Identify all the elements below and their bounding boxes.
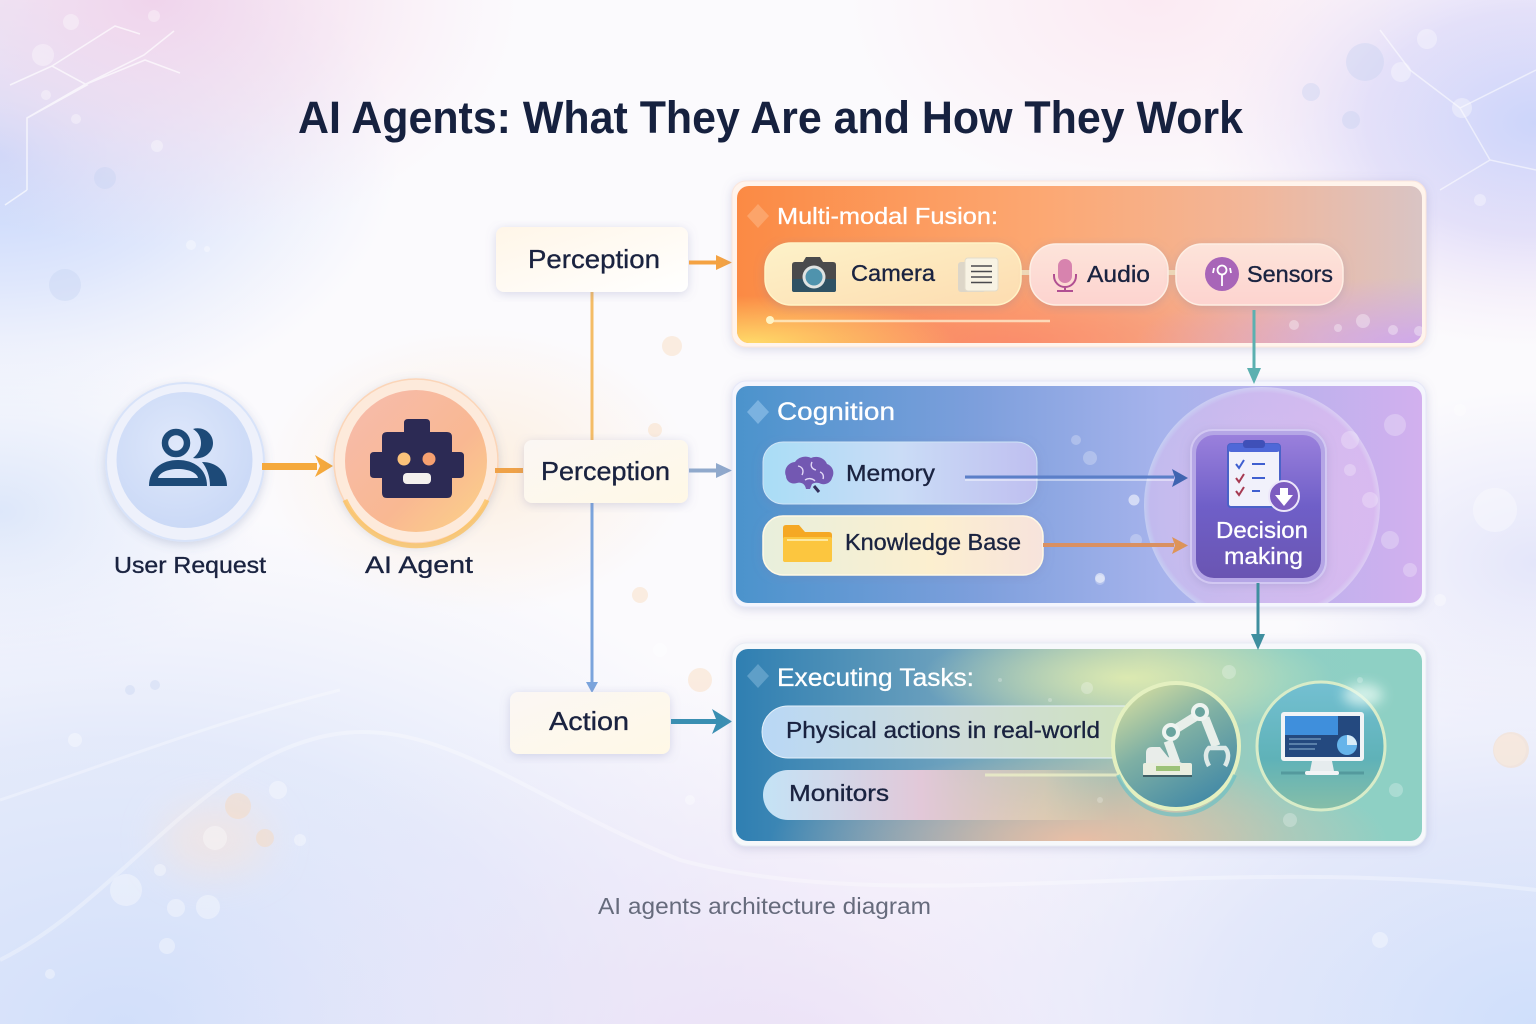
icon: checklist: [1228, 440, 1299, 511]
label: memory: Memory: [846, 460, 936, 486]
icon: robot: [370, 419, 464, 498]
arrow: decision to executing: [1251, 583, 1265, 650]
icon: robot arm: [1113, 683, 1239, 815]
box: action: Action: [549, 706, 629, 736]
box: perception top: Perception: [528, 244, 660, 274]
label: sensors: Sensors: [1247, 261, 1333, 287]
heading: cognition: Cognition: [777, 398, 895, 426]
icon: diamond: [747, 204, 769, 228]
pill: physical actions: Physical actions in real-world: [786, 717, 1100, 743]
caption: AI agents architecture diagram: [598, 893, 931, 919]
panel: multi-modal fusion: [732, 181, 1426, 347]
box: perception top: [496, 227, 688, 292]
pill: camera: [765, 243, 1021, 305]
pill: memory: [763, 442, 1037, 504]
node: user request: [106, 383, 267, 578]
pill: knowledge base: [763, 516, 1043, 575]
node: ai agent: [334, 379, 498, 579]
title: AI Agents: What They Are and How They Work: [298, 92, 1244, 143]
icon: diamond: [747, 400, 769, 424]
label: user request: User Request: [114, 552, 267, 578]
pill: physical actions: [762, 706, 1130, 758]
pill: sensors: [1176, 244, 1343, 305]
label: camera: Camera: [851, 260, 935, 286]
icon: document: [958, 258, 998, 292]
icon: users: [149, 428, 227, 486]
label: audio: Audio: [1087, 261, 1150, 287]
arrow: knowledge to decision: [1043, 537, 1188, 554]
arrow: perception to cognition: [689, 463, 732, 478]
pill: monitors: Monitors: [789, 780, 889, 806]
connector: perception vertical up: [590, 292, 594, 440]
connector: agent to perception: [495, 468, 523, 473]
icon: diamond: [747, 664, 769, 688]
icon: brain: [785, 457, 833, 492]
connector pills: [1021, 270, 1177, 275]
icon: monitor: [1257, 682, 1385, 810]
icon: sensor: [1205, 257, 1239, 291]
arrow: perception to action: [586, 503, 598, 693]
panel: executing tasks: [732, 643, 1426, 846]
arrow: memory to decision: [965, 469, 1188, 487]
label: knowledge base: Knowledge Base: [845, 529, 1021, 555]
arrow: user to agent: [262, 455, 333, 477]
label: decision making: [1216, 517, 1308, 569]
pill: monitors: [763, 770, 1118, 820]
heading: executing tasks: Executing Tasks:: [777, 664, 974, 692]
box: action: [510, 692, 670, 754]
icon: microphone: [1054, 259, 1076, 291]
icon: camera: [792, 257, 836, 292]
heading: multi-modal fusion: Multi-modal Fusion:: [777, 203, 998, 229]
arrow: action to executing: [671, 709, 732, 734]
box: perception middle: [524, 440, 688, 503]
arrow: perception to fusion: [689, 255, 732, 270]
icon: folder: [783, 525, 832, 562]
pill: audio: [1030, 244, 1168, 305]
box: perception middle: Perception: [541, 456, 670, 486]
card: decision making: [1191, 430, 1326, 583]
label: decision making: Decision: [1216, 517, 1308, 543]
arrow: sensors to cognition: [1247, 310, 1261, 384]
panel: cognition: [732, 381, 1426, 623]
label: ai agent: AI Agent: [365, 552, 473, 579]
label: decision making: making: [1224, 543, 1303, 569]
